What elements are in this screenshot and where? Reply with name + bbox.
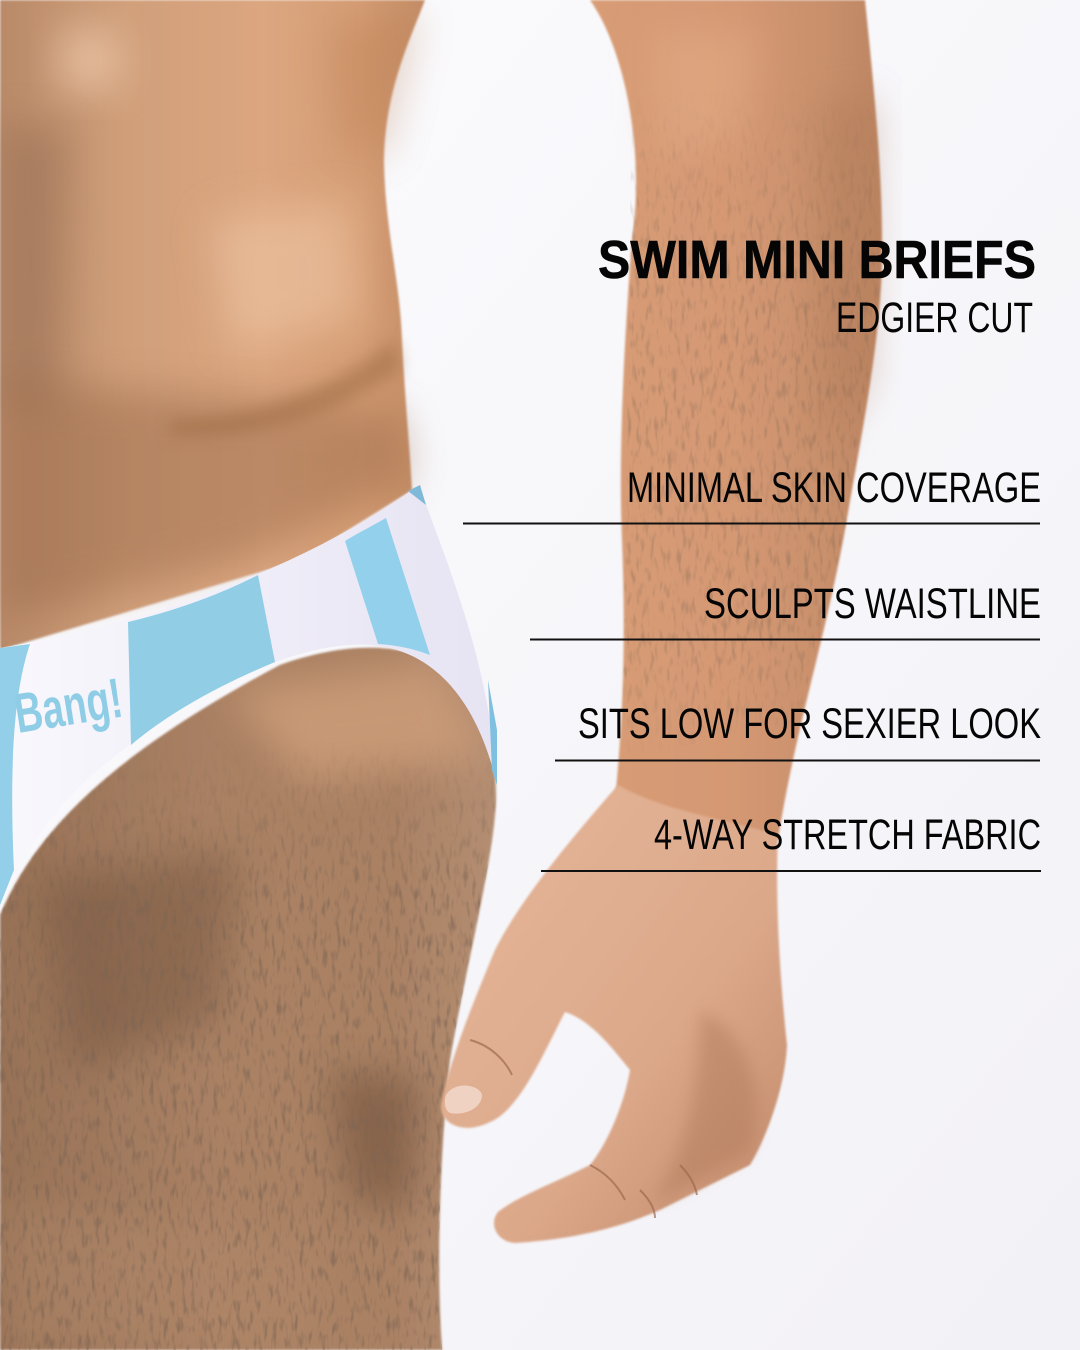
wide blue stripe bbox=[128, 575, 275, 745]
swim briefs bbox=[0, 485, 497, 910]
finger creases bbox=[470, 1040, 697, 1218]
narrow blue stripe bbox=[345, 518, 430, 655]
title: SWIM MINI BRIEFS bbox=[598, 230, 1036, 290]
thumbnail bbox=[445, 1086, 482, 1114]
torso shading bbox=[0, 10, 420, 620]
arm bbox=[590, 0, 900, 840]
blue edge at leg bbox=[488, 680, 497, 785]
logo: Bang! bbox=[10, 666, 127, 745]
thigh bbox=[0, 648, 496, 1350]
blue edge at waist bbox=[408, 485, 426, 505]
left blue stripe bbox=[0, 644, 30, 905]
torso bbox=[0, 0, 425, 650]
hand bbox=[441, 785, 787, 1243]
thigh shading and hair bbox=[0, 640, 520, 1350]
briefs base bbox=[0, 487, 497, 910]
